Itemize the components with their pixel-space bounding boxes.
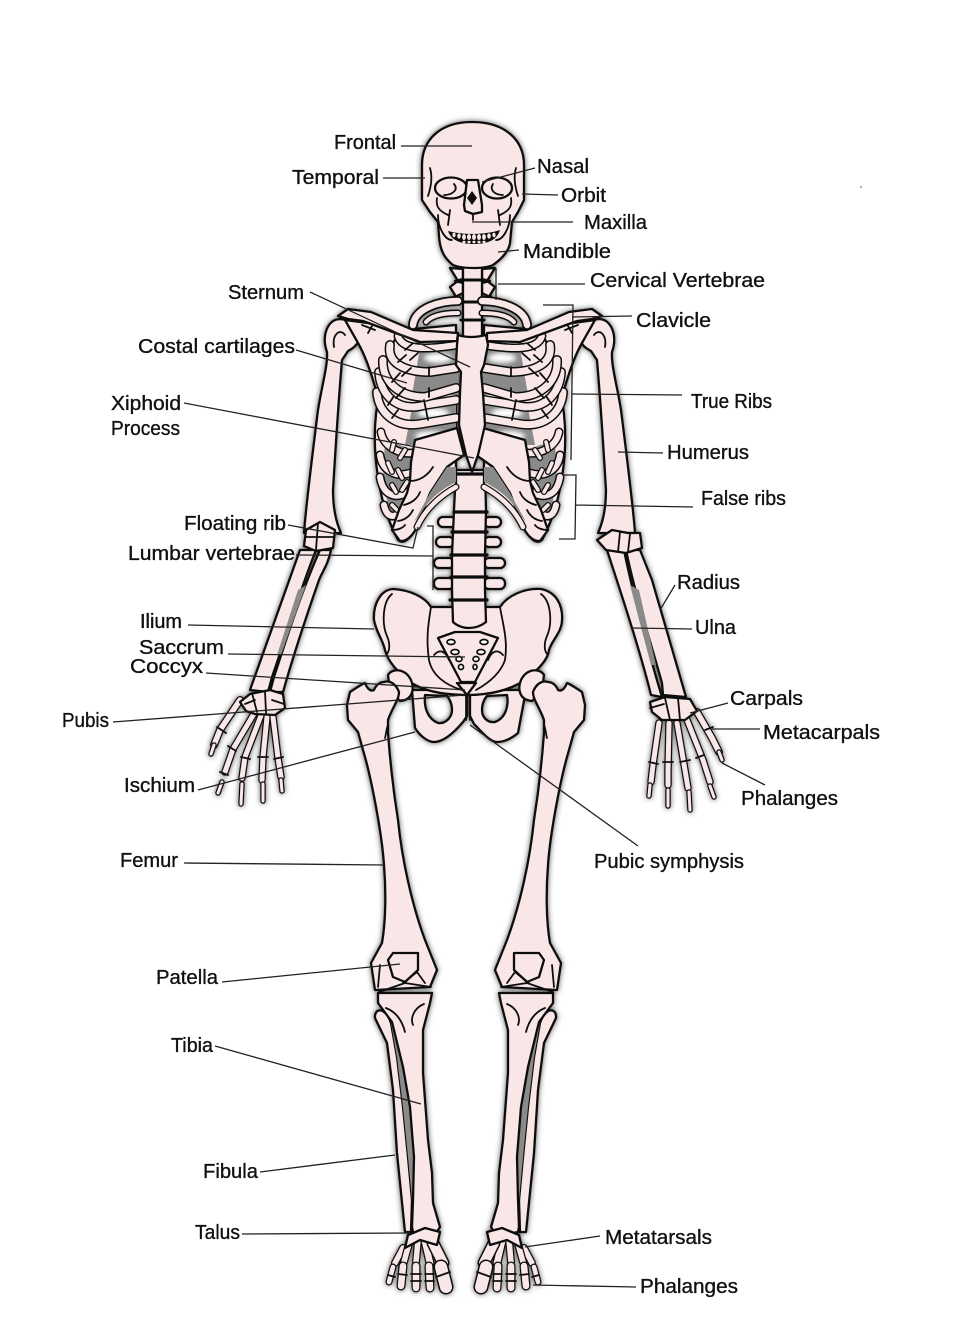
labels: Coccyx	[130, 656, 203, 678]
labels: Phalanges	[741, 788, 838, 810]
femur: left	[347, 670, 437, 992]
labels: Saccrum	[139, 637, 224, 659]
rib cage: left half	[375, 301, 464, 542]
labels: Lumbar vertebrae	[128, 543, 295, 565]
knee lines	[378, 725, 431, 992]
hand: left	[211, 690, 285, 804]
fibula	[375, 1010, 412, 1232]
shadowed gap	[391, 1023, 414, 1200]
leader lines	[113, 146, 765, 1287]
labels: Ilium	[140, 611, 182, 633]
labels: Nasal	[537, 156, 589, 178]
shadowed gaps	[383, 348, 458, 518]
rib cage: right half	[476, 301, 565, 542]
hand: right	[649, 697, 722, 810]
orbits	[435, 178, 467, 198]
labels: Tibia	[171, 1035, 214, 1057]
labels: Temporal	[292, 167, 379, 189]
femur: right	[495, 670, 585, 992]
leg: right tibia and fibula	[491, 993, 556, 1236]
labels: Phalanges	[640, 1276, 738, 1298]
coccyx	[457, 683, 476, 695]
skull	[422, 122, 524, 268]
clavicle: right	[487, 309, 602, 342]
pelvis	[374, 589, 562, 742]
patella	[388, 953, 418, 982]
orbit inner marks	[444, 184, 503, 195]
labels: Ischium	[124, 775, 195, 797]
labels: Costal cartilages	[138, 336, 295, 358]
cranium and jaw outline	[422, 122, 524, 268]
labels: Metatarsals	[605, 1227, 712, 1249]
scapula: right	[535, 320, 595, 397]
labels: False ribs	[701, 488, 786, 510]
arm: left humerus	[304, 319, 360, 533]
labels: Mandible	[523, 241, 611, 263]
lung windows	[415, 353, 452, 441]
ribs	[377, 301, 458, 516]
femoral shaft	[347, 681, 437, 990]
clavicle: left	[338, 309, 458, 342]
labels: Cervical Vertebrae	[590, 270, 765, 292]
labels: Femur	[120, 850, 178, 872]
pelvis: lower rami, left	[412, 690, 467, 742]
forearm: right radius and ulna	[597, 530, 686, 697]
leg: left fibula and tibia	[375, 993, 440, 1236]
nasal opening	[464, 180, 482, 214]
labels: Clavicle	[636, 310, 711, 332]
labels: Carpals	[730, 688, 803, 710]
labels: True Ribs	[691, 391, 772, 413]
labels: Humerus	[667, 442, 749, 464]
humerus head marks	[334, 332, 605, 347]
inner costal margin	[414, 467, 456, 522]
labels: Orbit	[561, 185, 606, 207]
labels: Fibula	[203, 1161, 259, 1183]
femoral head	[388, 670, 413, 701]
rib rungs	[388, 344, 418, 418]
sternum	[456, 335, 488, 472]
crescents in costal margin	[392, 367, 433, 530]
lumbar spine	[452, 470, 486, 628]
labels: Patella	[156, 967, 219, 989]
labels: Pubic symphysis	[594, 851, 744, 873]
costal cartilage block	[392, 428, 464, 541]
foot: right	[477, 1228, 539, 1288]
labels: Talus	[195, 1222, 240, 1244]
labels: Frontal	[334, 132, 396, 154]
tibia plateau lines	[386, 1004, 424, 1032]
lumbar transverse processes	[434, 517, 505, 589]
labels: Metacarpals	[763, 722, 880, 744]
scapula: left	[345, 320, 405, 397]
labels: Floating rib	[184, 513, 286, 535]
ilium and pelvic basin	[374, 589, 562, 695]
labels: Radius	[677, 572, 740, 594]
shoulder details	[362, 325, 578, 333]
pubic symphysis	[466, 695, 470, 720]
labels	[62, 132, 880, 1298]
arm: right humerus	[579, 319, 635, 533]
speck	[860, 186, 862, 188]
labels: Sternum	[228, 282, 304, 304]
sacral foramina	[447, 640, 488, 670]
costal region	[375, 325, 456, 542]
pelvis: lower rami, right	[470, 690, 526, 742]
labels: Process	[111, 418, 180, 440]
intervertebral discs	[450, 474, 487, 600]
tibia	[378, 993, 440, 1236]
skeleton illustration	[211, 122, 722, 1288]
temporal lines	[428, 168, 518, 240]
labels: Maxilla	[584, 212, 648, 234]
labels: Xiphoid	[111, 393, 181, 415]
foot: left	[388, 1228, 450, 1288]
labels: Pubis	[62, 710, 109, 732]
cervical vertebrae	[450, 266, 495, 338]
teeth	[448, 230, 500, 244]
labels: Ulna	[695, 617, 737, 639]
sacrum	[438, 632, 498, 682]
forearm: left radius and ulna	[250, 522, 335, 692]
